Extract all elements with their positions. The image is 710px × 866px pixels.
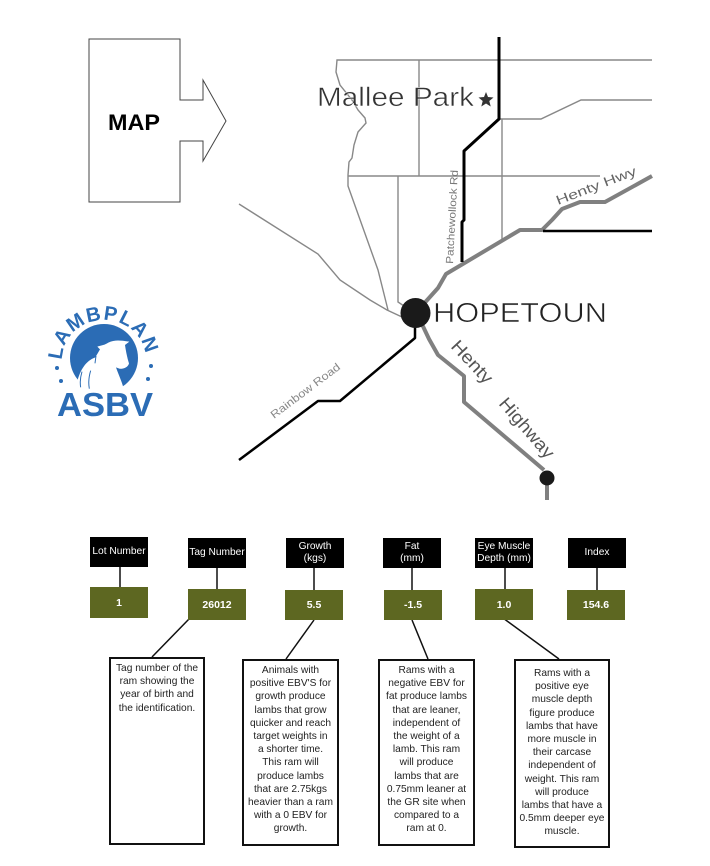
text box: eye muscle explanation: figure produce: [529, 708, 595, 719]
header: Index: Index: [585, 547, 609, 558]
value: eye muscle depth: 1.0: [497, 598, 511, 610]
value: growth: [285, 590, 343, 620]
header: Growth: Growth: [299, 540, 331, 552]
header: Eye Muscle Depth: Depth (mm): [477, 553, 531, 564]
header: Lot Number: Lot Number: [92, 546, 146, 557]
value: lot number: 1: [116, 596, 122, 608]
text box: fat explanation: negative EBV for: [388, 678, 465, 689]
text box: fat explanation: fat produce lambs: [386, 691, 467, 702]
text box: growth explanation: that are 2.75kgs: [254, 784, 327, 795]
map labels: HOPETOUN: [433, 297, 607, 328]
text box: eye muscle explanation: independent of: [528, 760, 596, 771]
text box: tag number explanation: year of birth and: [120, 689, 194, 700]
text box: growth explanation: positive EBV'S for: [250, 678, 331, 689]
text box: fat explanation: [378, 659, 475, 846]
header: Tag Number: Tag Number: [189, 547, 245, 558]
text box: tag number explanation: ram showing the: [120, 676, 194, 687]
Hopetoun town dot: [400, 298, 430, 328]
header: Growth: (kgs): [304, 553, 326, 564]
header: Fat: Fat: [405, 540, 419, 552]
map labels: Rainbow Road: [269, 361, 343, 421]
text box: fat explanation: the weight of a: [393, 731, 460, 742]
text box: eye muscle explanation: lambs that have a: [522, 800, 602, 811]
text box: fat explanation: Rams with a: [398, 665, 455, 676]
value: tag number: 26012: [202, 598, 232, 610]
header: Fat: (mm): [400, 553, 424, 564]
text box: eye muscle explanation: more muscle in: [527, 734, 597, 745]
text box: fat explanation: the GR site when: [387, 797, 466, 808]
text box: growth explanation: target weights in: [253, 731, 328, 742]
text box: eye muscle explanation: [514, 659, 610, 848]
text box: eye muscle explanation: weight. This ram: [525, 774, 599, 785]
text box: growth explanation: Animals with: [262, 665, 319, 676]
text box: growth explanation: with a 0 EBV for: [254, 810, 327, 821]
value: index: [567, 590, 625, 620]
map labels: Henty Hwy: [554, 163, 639, 208]
text box: growth explanation: produce lambs: [257, 771, 324, 782]
map arrow callout: MAP: [108, 110, 160, 135]
text box: fat explanation: lambs that are: [394, 771, 459, 782]
text box: growth explanation: This ram will: [262, 757, 319, 768]
text box: fat explanation: will produce: [400, 757, 453, 768]
text box: tag number explanation: [109, 657, 205, 845]
value: fat: -1.5: [404, 599, 422, 611]
text box: fat explanation: independent of: [393, 718, 460, 729]
Henty Highway: [420, 176, 652, 500]
star marker: [478, 92, 494, 106]
text box: eye muscle explanation: muscle.: [544, 826, 580, 837]
header: Eye Muscle Depth: Eye Muscle: [478, 540, 530, 552]
text box: growth explanation: heavier than a ram: [248, 797, 333, 808]
value: lot number: [90, 587, 148, 618]
text box: eye muscle explanation: will produce: [535, 787, 589, 798]
map labels: Mallee Park: [317, 82, 475, 112]
map labels: Patchewollock Rd: [444, 169, 461, 264]
text box: eye muscle explanation: Rams with a: [534, 668, 590, 679]
text box: fat explanation: ram at 0.: [406, 823, 447, 834]
map labels: Henty: [447, 336, 497, 388]
value: fat: [384, 590, 442, 620]
header: Tag Number: [188, 538, 246, 568]
text box: tag number explanation: Tag number of the: [116, 663, 198, 674]
text box: growth explanation: quicker and reach: [250, 718, 331, 729]
icon: sheep: [75, 341, 129, 395]
text box: growth explanation: lambs that grow: [255, 705, 326, 716]
text box: growth explanation: growth produce: [255, 691, 326, 702]
minor roads: [239, 60, 652, 317]
text box: fat explanation: lamb. This ram: [393, 744, 460, 755]
value: growth: 5.5: [307, 599, 321, 611]
value: tag number: [188, 589, 246, 620]
map labels: [269, 82, 639, 462]
text box: eye muscle explanation: 0.5mm deeper eye: [520, 813, 604, 824]
logo wordmark: LAMBPLAN: LAMBPLAN: [48, 306, 158, 359]
header: Fat: [383, 538, 441, 568]
logo wordmark: ASBV: ASBV: [57, 386, 153, 423]
sealed black roads: [239, 37, 652, 460]
map labels: Highway: [495, 394, 559, 462]
text box: eye muscle explanation: their carcase: [533, 747, 591, 758]
text box: tag number explanation: the identification.: [119, 703, 195, 714]
header: Index: [568, 538, 626, 568]
value: index: 154.6: [583, 599, 609, 611]
text box: growth explanation: a shorter time.: [258, 744, 323, 755]
header: Growth: [286, 538, 344, 568]
header: Lot Number: [90, 537, 148, 567]
value: eye muscle depth: [475, 589, 533, 620]
text box: fat explanation: compared to a: [394, 810, 459, 821]
text box: eye muscle explanation: positive eye: [535, 681, 589, 692]
text box: eye muscle explanation: lambs that have: [526, 721, 598, 732]
text box: eye muscle explanation: muscle depth: [532, 694, 592, 705]
southern town dot: [540, 470, 554, 486]
header: Eye Muscle Depth: [475, 538, 533, 568]
text box: fat explanation: 0.75mm leaner at: [387, 784, 466, 795]
text box: fat explanation: that are leaner,: [393, 705, 460, 716]
text box: growth explanation: growth.: [274, 823, 307, 834]
text box: growth explanation: [242, 659, 339, 846]
